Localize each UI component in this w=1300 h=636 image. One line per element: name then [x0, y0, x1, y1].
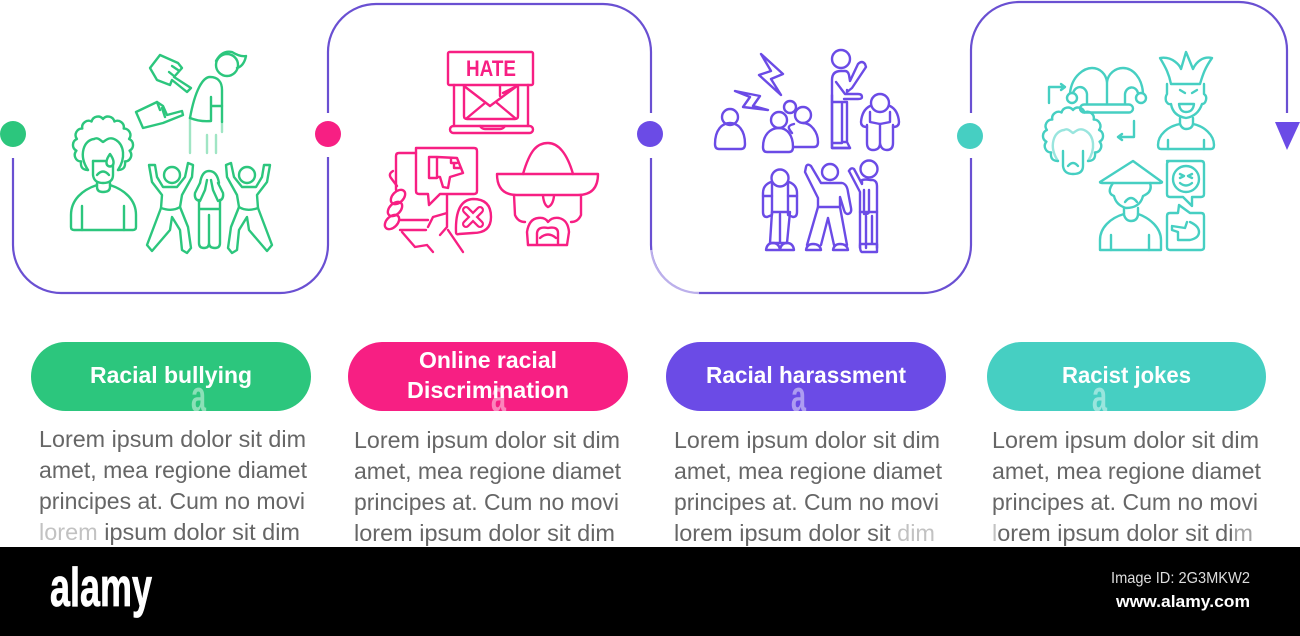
body text: Lorem ipsum dolor sit dim	[39, 426, 306, 452]
icon: hate mail and phone	[382, 52, 598, 252]
icon: jester hat and mocked people	[1043, 52, 1214, 250]
step dot	[315, 121, 341, 147]
body text	[38, 426, 308, 547]
pill heading: a	[791, 372, 806, 421]
timeline connector	[13, 2, 1287, 293]
pill heading: Racial harassment	[706, 362, 906, 388]
body text: lorem ipsum dolor sit dim	[354, 520, 615, 546]
body text	[674, 427, 943, 547]
step dot	[0, 121, 26, 147]
icon: bullied children	[71, 52, 272, 253]
image id: Image ID: 2G3MKW2	[1111, 570, 1250, 587]
website: www.alamy.com	[1115, 593, 1250, 611]
body text: lorem ipsum dolor sit dim	[39, 519, 300, 545]
pill heading: a	[191, 372, 206, 421]
panel: racist jokes	[957, 52, 1266, 547]
body text	[354, 427, 622, 546]
pill heading: a	[1092, 372, 1107, 421]
body text: principes at. Cum no movi	[39, 488, 305, 514]
icon: hate mail and phone: HATE	[466, 56, 516, 81]
step dot	[637, 121, 663, 147]
pill heading	[987, 342, 1266, 411]
body text: Lorem ipsum dolor sit dim	[992, 427, 1259, 453]
pill heading	[666, 342, 946, 411]
body text: Lorem ipsum dolor sit dim	[674, 427, 940, 453]
pill heading	[31, 342, 311, 411]
body text: lorem ipsum dolor sit dim	[992, 520, 1253, 546]
body text: principes at. Cum no movi	[674, 489, 939, 515]
body text: amet, mea regione diamet	[354, 458, 622, 484]
pill heading: Online racial	[419, 347, 557, 373]
pill heading: a	[491, 372, 506, 421]
icon: harassing groups	[715, 50, 899, 252]
body text: amet, mea regione diamet	[992, 458, 1262, 484]
watermark footer band	[0, 547, 1300, 636]
alamy logo: alamy	[50, 556, 152, 618]
pill heading: Racist jokes	[1062, 362, 1191, 388]
body text: amet, mea regione diamet	[674, 458, 943, 484]
body text	[991, 427, 1262, 547]
pill heading: Racial bullying	[90, 362, 252, 388]
body text: Lorem ipsum dolor sit dim	[354, 427, 620, 453]
panel: racial bullying	[0, 52, 311, 547]
panel: online racial discrimination	[315, 52, 628, 546]
pill heading: Discrimination	[407, 377, 569, 403]
step dot	[957, 123, 983, 149]
arrow head	[1275, 122, 1300, 150]
pill heading	[348, 342, 628, 411]
body text: principes at. Cum no movi	[992, 489, 1258, 515]
panel: racial harassment	[637, 50, 946, 547]
body text: principes at. Cum no movi	[354, 489, 619, 515]
body text: lorem ipsum dolor sit dim	[674, 520, 935, 546]
body text: amet, mea regione diamet	[39, 457, 308, 483]
